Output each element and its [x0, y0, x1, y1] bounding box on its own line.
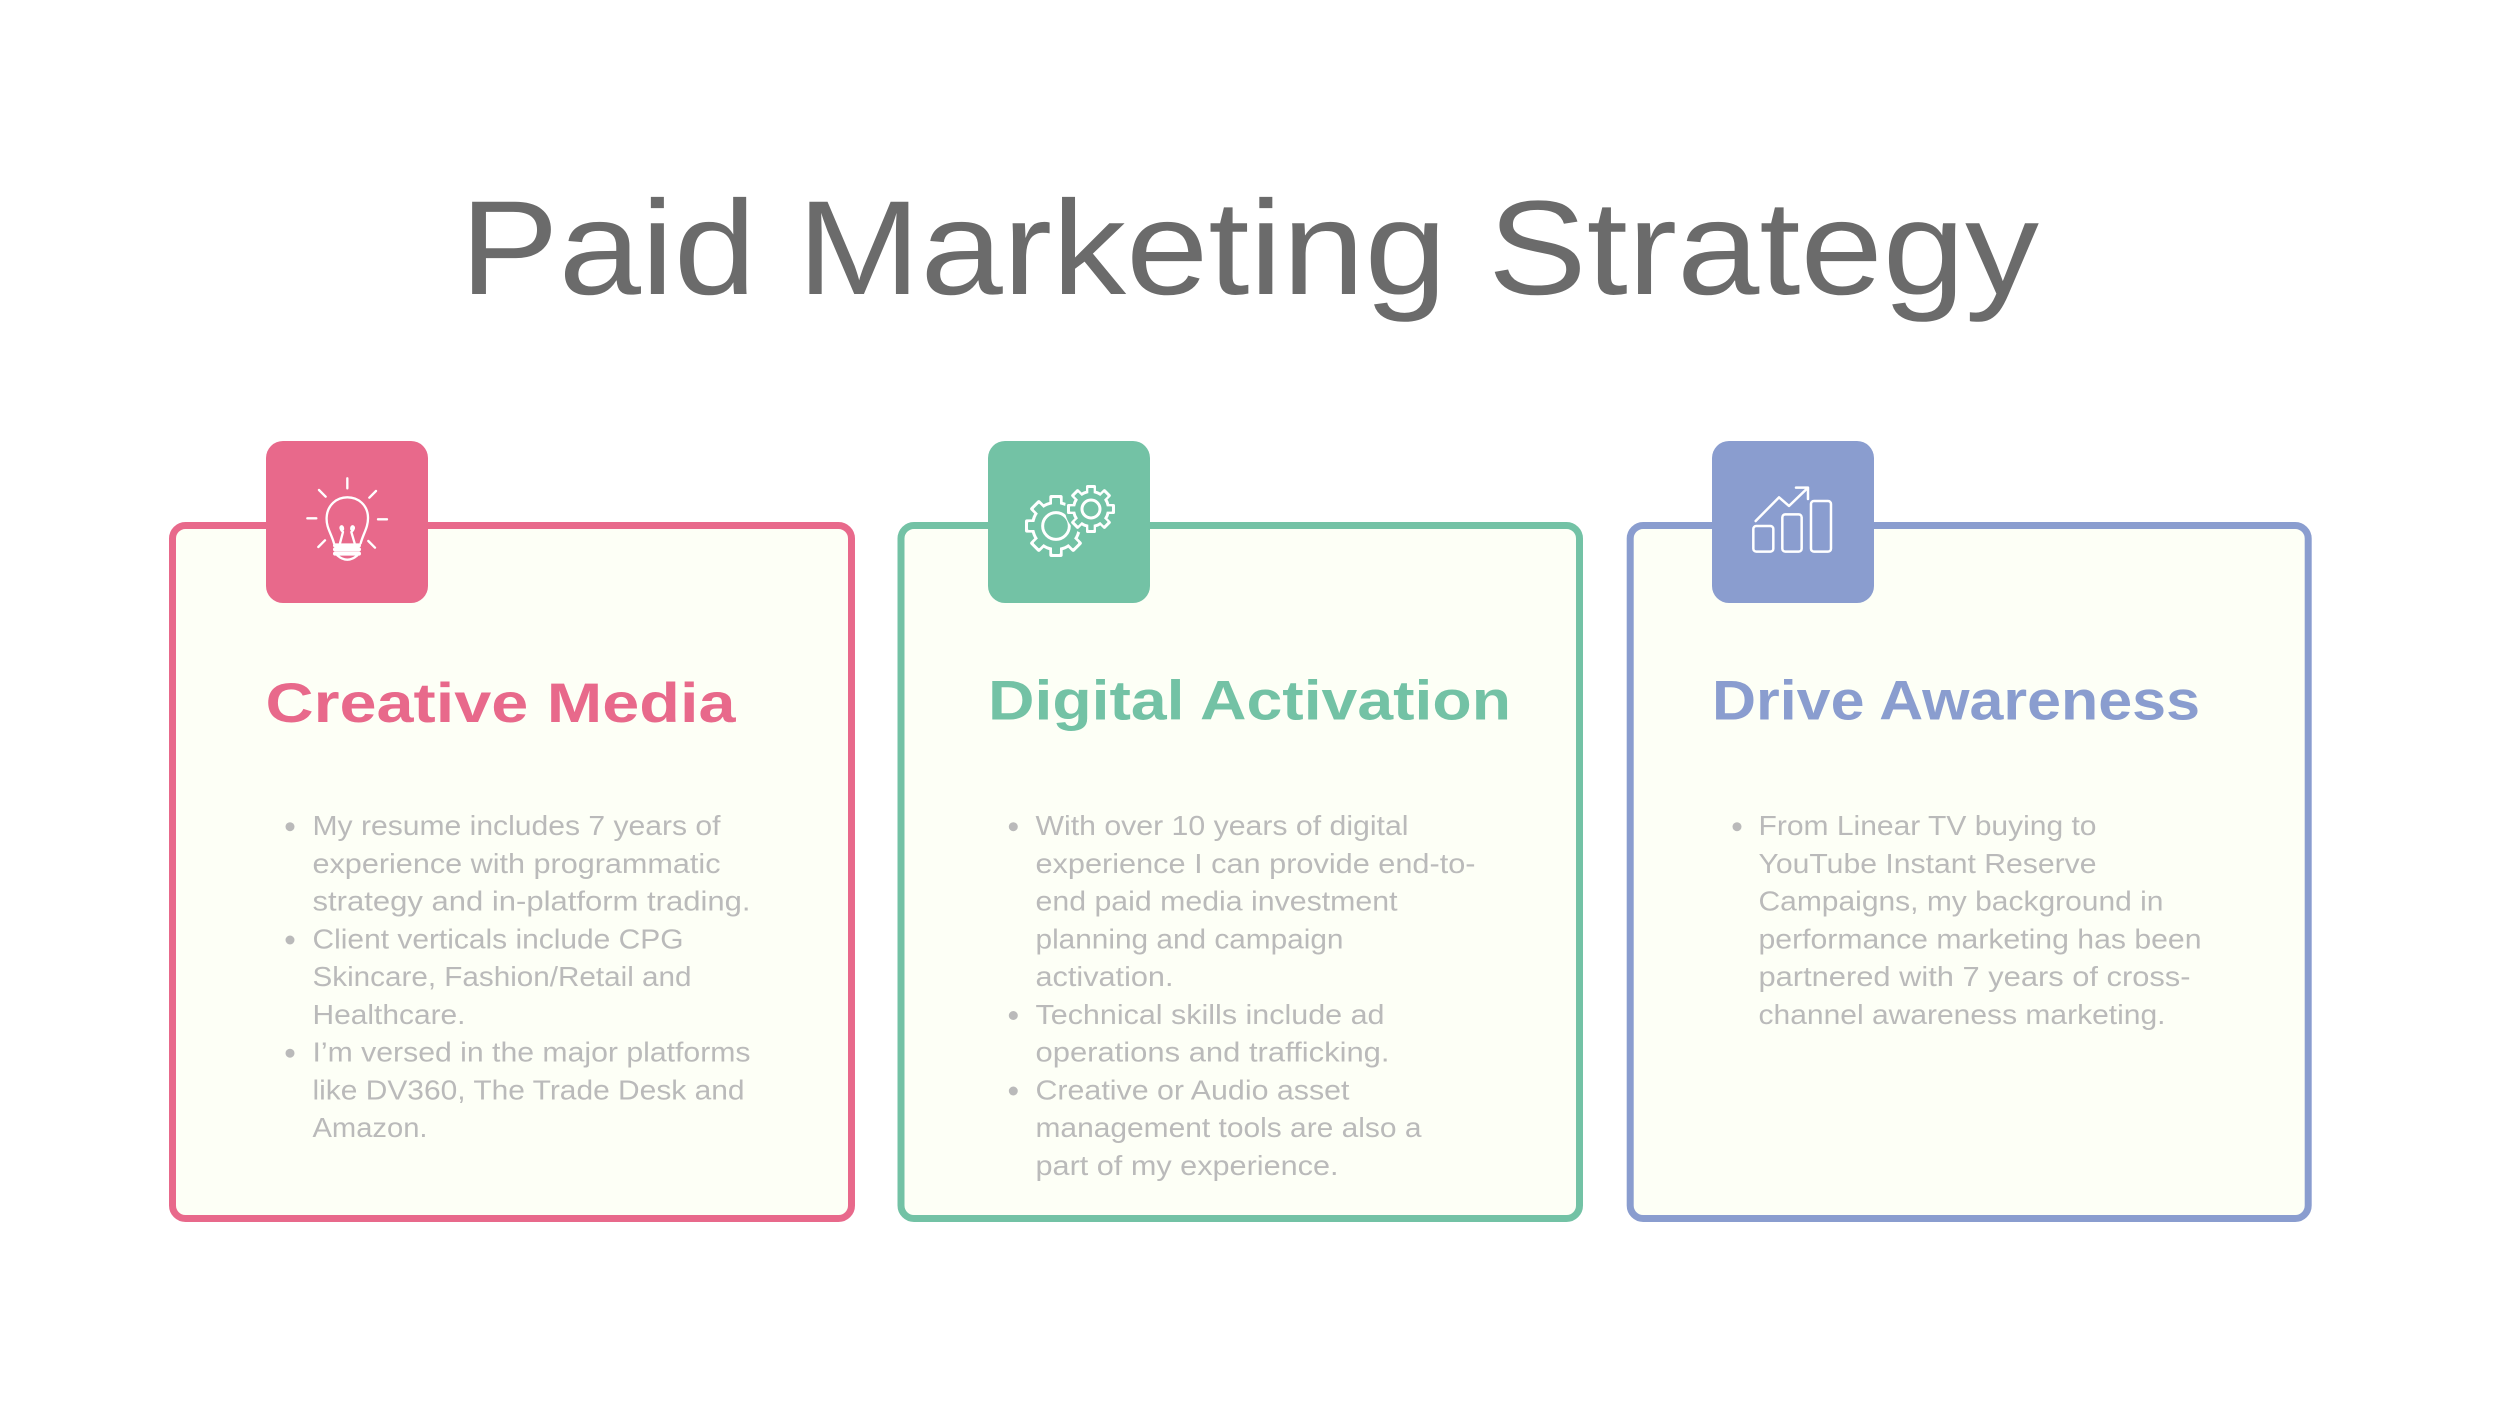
- bullet list: Digital Activation: planning and campaign: [1036, 923, 1344, 954]
- bullet list: Creative Media: strategy and in-platform trading.: [312, 886, 750, 916]
- bullet text: Drive Awareness: partnered with 7 years of cross-: [1758, 961, 2190, 992]
- heading: Digital Activation: Digital Activation: [988, 668, 1511, 732]
- icon: growth chart: [1712, 441, 1874, 603]
- bullet text: Drive Awareness: From Linear TV buying to: [1758, 810, 2096, 841]
- bullet list: Creative Media: My resume includes 7 years of: [312, 810, 721, 841]
- bullet text: Drive Awareness: channel awareness marketing.: [1758, 999, 2166, 1030]
- bullet list: Digital Activation: management tools are also a: [1036, 1112, 1422, 1143]
- bullet list: Digital Activation: Technical skills include ad: [1036, 999, 1384, 1030]
- bullet list: Creative Media: I’m versed in the major platforms: [312, 1036, 750, 1068]
- bullet list: Digital Activation: activation.: [1036, 961, 1174, 992]
- card frame: Drive Awareness: [1630, 526, 2308, 1218]
- bullet list: Digital Activation: Creative or Audio asset: [1036, 1074, 1350, 1105]
- icon: gears: [988, 441, 1150, 603]
- card frame: Creative Media: [172, 526, 852, 1218]
- bullet text: Drive Awareness: YouTube Instant Reserve: [1758, 848, 2096, 879]
- heading: Drive Awareness: Drive Awareness: [1712, 668, 2200, 732]
- heading: Creative Media: Creative Media: [266, 671, 737, 734]
- bullet list: Creative Media: Client verticals include CPG: [312, 923, 684, 954]
- bullet list: Digital Activation: part of my experience.: [1036, 1150, 1338, 1181]
- bullet text: Drive Awareness: Campaigns, my background in: [1758, 886, 2164, 916]
- panel: Digital Activation: [901, 441, 1580, 1218]
- icon: light bulb: [266, 441, 428, 603]
- bullet list: Creative Media: Skincare, Fashion/Retail and: [312, 961, 692, 992]
- bullet list: Digital Activation: operations and trafficking.: [1036, 1036, 1390, 1068]
- bullet list: Creative Media: [286, 810, 750, 1143]
- bullet list: Digital Activation: experience I can provide end-to-: [1036, 848, 1476, 879]
- panel: Creative Media: [172, 441, 852, 1218]
- card frame: Digital Activation: [901, 526, 1580, 1218]
- panel: Drive Awareness: [1630, 441, 2308, 1218]
- bullet list: Creative Media: experience with programmatic: [312, 848, 720, 879]
- title: Paid Marketing Strategy: [460, 174, 2039, 323]
- bullet list: Digital Activation: end paid media investment: [1036, 886, 1398, 916]
- bullet text: Drive Awareness: [1732, 810, 2202, 1030]
- bullet list: Creative Media: like DV360, The Trade Desk and: [312, 1074, 744, 1105]
- bullet list: Digital Activation: With over 10 years of digital: [1036, 810, 1408, 841]
- bullet list: Digital Activation: [1009, 810, 1476, 1181]
- bullet text: Drive Awareness: performance marketing has been: [1758, 923, 2202, 954]
- bullet list: Creative Media: Healthcare.: [312, 999, 466, 1030]
- bullet list: Creative Media: Amazon.: [312, 1112, 428, 1143]
